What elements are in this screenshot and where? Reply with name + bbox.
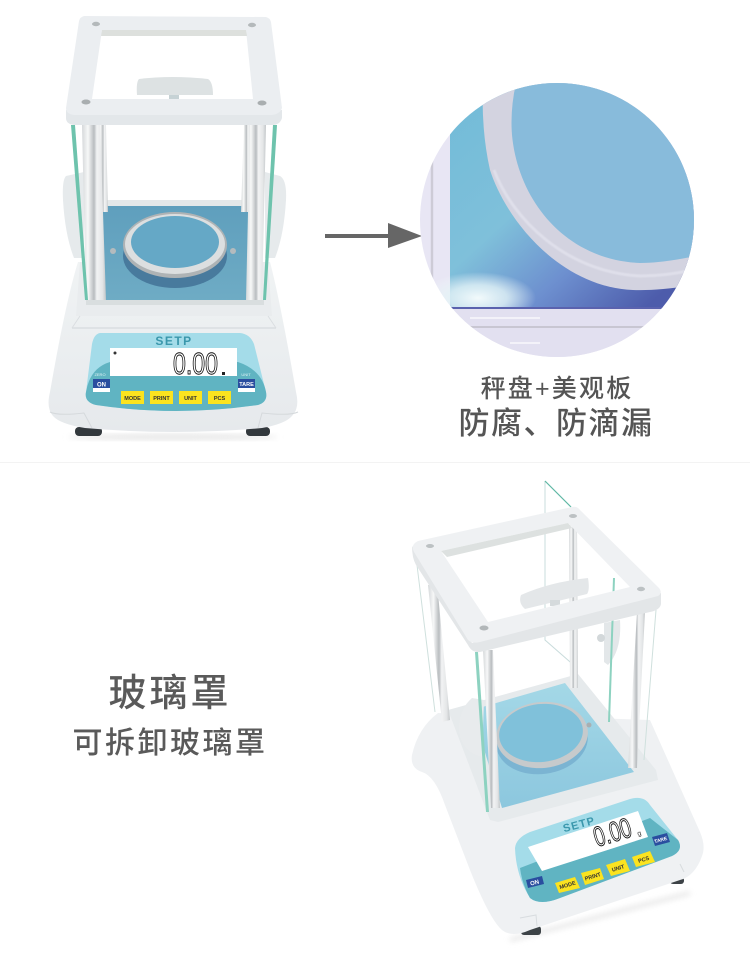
brand logo: SETP bbox=[155, 334, 193, 348]
MODE key: MODE bbox=[124, 396, 141, 402]
left side handle bbox=[459, 698, 484, 757]
PCS key: PCS bbox=[214, 396, 225, 402]
feet bbox=[521, 926, 541, 935]
right rod bbox=[628, 612, 645, 768]
caption: glass cover bbox=[72, 673, 268, 760]
pan surface bbox=[512, 83, 700, 263]
TARE key: TARE bbox=[654, 836, 669, 845]
blue plate bbox=[450, 83, 694, 308]
weighing pan bbox=[123, 212, 227, 278]
ON key: ON bbox=[97, 382, 106, 388]
pan screws bbox=[110, 248, 116, 254]
back wall strip bbox=[97, 200, 250, 206]
caption: pan and plate bbox=[458, 375, 654, 441]
arrow bbox=[325, 223, 422, 248]
ring bbox=[483, 83, 700, 290]
feet bbox=[75, 427, 102, 436]
control panel bbox=[86, 333, 266, 411]
lavender background bbox=[420, 134, 450, 304]
rear door handle bbox=[137, 77, 213, 95]
ZERO label: ZERO bbox=[94, 372, 106, 377]
PCS key: PCS bbox=[638, 856, 651, 865]
UNIT key bbox=[606, 859, 630, 876]
base shadow bbox=[510, 893, 690, 940]
PRINT key bbox=[581, 868, 604, 885]
control panel bbox=[515, 798, 680, 902]
front rods bbox=[82, 125, 106, 300]
ON key bbox=[93, 379, 110, 392]
PCS key bbox=[632, 851, 655, 867]
subheading: 可拆卸玻璃罩 bbox=[72, 727, 268, 760]
UNIT key: UNIT bbox=[611, 864, 626, 874]
left lower white rim bbox=[86, 300, 264, 305]
LCD display: 0.00 bbox=[590, 812, 635, 853]
weighing pan bbox=[493, 697, 591, 773]
rear door handle bbox=[520, 578, 589, 609]
PRINT key bbox=[150, 391, 173, 404]
pan shadow bbox=[492, 702, 592, 780]
PCS key bbox=[208, 391, 231, 404]
LCD display: g bbox=[637, 830, 642, 838]
product photo: angled view balance bbox=[412, 481, 704, 940]
caption line 2: 防腐、防滴漏 bbox=[458, 406, 654, 441]
heading: 玻璃罩 bbox=[108, 673, 232, 715]
back rods bbox=[98, 125, 108, 212]
magnified circle: pan and plate detail bbox=[420, 83, 700, 357]
LCD display bbox=[528, 811, 648, 871]
pan screw bbox=[586, 722, 592, 728]
balance base body bbox=[412, 713, 704, 934]
brand logo: SETP bbox=[562, 815, 597, 835]
top frame bbox=[412, 507, 661, 652]
UNIT key bbox=[179, 391, 202, 404]
PRINT key: PRINT bbox=[584, 872, 602, 883]
product photo: front view balance bbox=[49, 16, 298, 440]
blue base plate bbox=[97, 206, 250, 304]
base shadow bbox=[68, 434, 278, 440]
chamber floor tray bbox=[76, 262, 272, 316]
rear rod bbox=[569, 525, 578, 688]
MODE key bbox=[555, 877, 580, 893]
green glass edges bbox=[475, 652, 489, 812]
right side handle bbox=[604, 620, 620, 665]
ON key bbox=[526, 876, 544, 888]
blue base plate bbox=[472, 683, 634, 808]
detached glass pane bbox=[545, 481, 577, 668]
caption line 1: 秤盘+美观板 bbox=[481, 375, 633, 403]
TARE key bbox=[652, 833, 670, 846]
TARE key: TARE bbox=[239, 382, 254, 388]
pan shadow bbox=[123, 224, 227, 288]
TARE key bbox=[238, 379, 255, 392]
MODE key bbox=[121, 391, 144, 404]
LCD display: 0.00 bbox=[173, 346, 218, 381]
UNIT label: UNIT bbox=[241, 372, 251, 377]
ON key: ON bbox=[530, 879, 540, 888]
icon: right side handle bbox=[265, 172, 286, 258]
icon: left side handle bbox=[63, 172, 84, 258]
LCD display bbox=[110, 346, 237, 381]
chamber floor tray bbox=[448, 674, 658, 822]
section divider bbox=[0, 462, 750, 463]
UNIT key: UNIT bbox=[184, 396, 198, 402]
balance base body bbox=[49, 262, 297, 432]
PRINT key: PRINT bbox=[153, 396, 170, 402]
lower rail bbox=[453, 309, 661, 357]
left rear rod bbox=[428, 583, 450, 722]
front rod bbox=[483, 650, 500, 808]
top frame bbox=[66, 16, 282, 125]
MODE key: MODE bbox=[559, 880, 577, 891]
green glass panes bbox=[71, 125, 88, 300]
